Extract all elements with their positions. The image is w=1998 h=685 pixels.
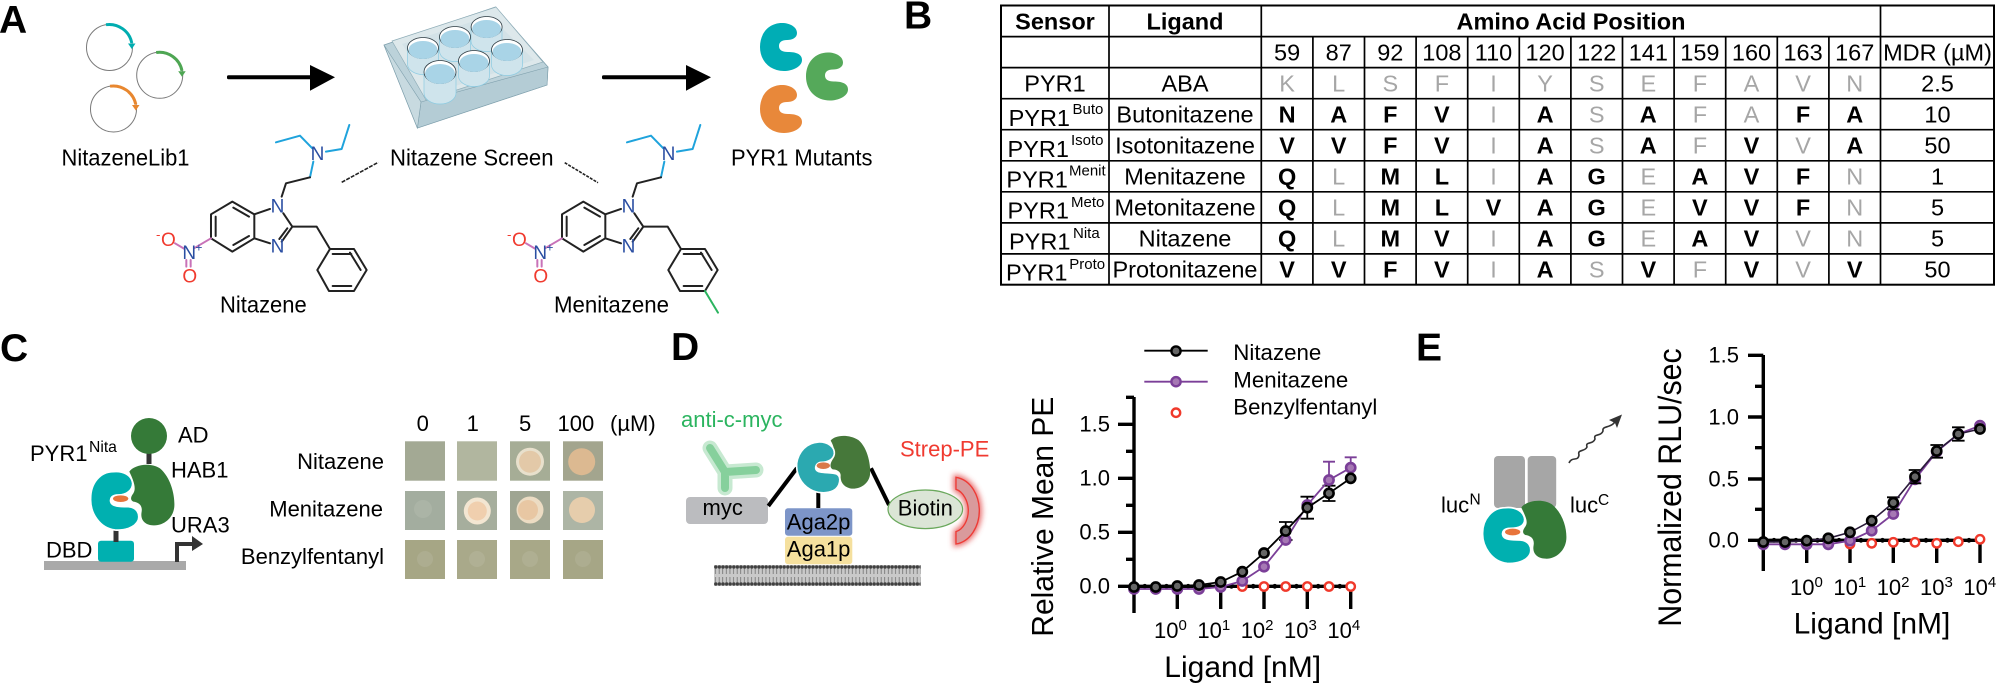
table: sensors and amino acid positions: G bbox=[1588, 226, 1606, 252]
chart: relative mean PE dose response: 3 bbox=[1308, 617, 1317, 634]
chart: normalized RLU dose response: 10 bbox=[1920, 575, 1944, 600]
chart: normalized RLU dose response: Ligand [nM] bbox=[1794, 607, 1950, 640]
table: sensors and amino acid positions: V bbox=[1795, 70, 1811, 96]
table: sensors and amino acid positions: Buto bbox=[1072, 101, 1103, 118]
table: sensors and amino acid positions: Amino Acid Position bbox=[1457, 8, 1685, 34]
icon: plasmid library bbox=[86, 24, 186, 132]
table: sensors and amino acid positions: 167 bbox=[1835, 39, 1874, 65]
table: sensors and amino acid positions: E bbox=[1640, 226, 1656, 252]
table: sensors and amino acid positions: V bbox=[1434, 132, 1450, 158]
table: sensors and amino acid positions: E bbox=[1640, 70, 1656, 96]
legend: Benzylfentanyl bbox=[1233, 394, 1377, 419]
table: sensors and amino acid positions: V bbox=[1744, 164, 1760, 190]
chart: normalized RLU dose response: 2 bbox=[1901, 574, 1910, 591]
table: sensors and amino acid positions: V bbox=[1434, 101, 1450, 127]
table: sensors and amino acid positions: A bbox=[1744, 101, 1760, 127]
table: sensors and amino acid positions: MDR (µM) bbox=[1883, 39, 1992, 65]
chart: relative mean PE dose response: 10 bbox=[1197, 618, 1222, 643]
chemical structure: menitazene: O bbox=[533, 267, 548, 288]
table: sensors and amino acid positions: 87 bbox=[1326, 39, 1352, 65]
table: sensors and amino acid positions: V bbox=[1640, 257, 1656, 283]
table: sensors and amino acid positions: 160 bbox=[1732, 39, 1771, 65]
table: sensors and amino acid positions: G bbox=[1588, 195, 1606, 221]
table: sensors and amino acid positions: 1 bbox=[1931, 164, 1944, 190]
arrow: library to screen bbox=[227, 65, 335, 91]
table: sensors and amino acid positions: V bbox=[1847, 257, 1863, 283]
yeast concentration headers: 5 bbox=[519, 411, 531, 436]
icon: streptavidin-PE crescent bbox=[956, 477, 979, 544]
membrane bbox=[714, 565, 921, 586]
table: sensors and amino acid positions: M bbox=[1381, 195, 1400, 221]
chart: normalized RLU dose response: 0.0 bbox=[1708, 528, 1739, 553]
table: sensors and amino acid positions: A bbox=[1846, 132, 1863, 158]
chart: normalized RLU dose response: 0 bbox=[1814, 574, 1823, 591]
table: sensors and amino acid positions: A bbox=[1691, 226, 1708, 252]
table: sensors and amino acid positions: I bbox=[1490, 164, 1497, 190]
icon: luminescence squiggle arrow bbox=[1569, 414, 1622, 463]
label: Strep-PE: Strep-PE bbox=[900, 437, 989, 462]
chemical structure: menitazene: N bbox=[662, 144, 675, 165]
table: sensors and amino acid positions: Ligand bbox=[1146, 8, 1224, 34]
y axis title: Relative Mean PE: Relative Mean PE bbox=[1025, 397, 1060, 637]
label: luc C: luc bbox=[1570, 492, 1598, 518]
table: sensors and amino acid positions: A bbox=[1640, 101, 1657, 127]
table: sensors and amino acid positions: PYR1 bbox=[1008, 136, 1069, 162]
yeast row labels: Nitazene bbox=[297, 449, 384, 474]
table: sensors and amino acid positions: V bbox=[1434, 226, 1450, 252]
table: sensors and amino acid positions: F bbox=[1796, 164, 1810, 190]
table: sensors and amino acid positions: 50 bbox=[1924, 257, 1951, 283]
table: sensors and amino acid positions: M bbox=[1381, 226, 1400, 252]
chemical structure: nitazene bbox=[156, 125, 367, 291]
table: sensors and amino acid positions: V bbox=[1795, 257, 1811, 283]
table: sensors and amino acid positions: Q bbox=[1278, 164, 1296, 190]
panel: C yeast two-hybrid bbox=[0, 327, 656, 579]
chemical structure: nitazene: O bbox=[182, 267, 197, 288]
label: anti-c-myc: anti-c-myc bbox=[681, 407, 782, 432]
yeast concentration headers: 100 bbox=[558, 411, 594, 436]
table: sensors and amino acid positions: 92 bbox=[1377, 39, 1403, 65]
table: sensors and amino acid positions: V bbox=[1795, 132, 1811, 158]
linkers bbox=[768, 468, 889, 508]
chemical structure: nitazene: N bbox=[271, 236, 284, 257]
chemical structure: menitazene: N bbox=[622, 196, 635, 217]
chart: normalized RLU dose response: 1 bbox=[1858, 574, 1866, 591]
chart: relative mean PE dose response: 10 bbox=[1241, 618, 1265, 643]
chemical structure: menitazene: N bbox=[533, 243, 547, 264]
table: sensors and amino acid positions: N bbox=[1846, 164, 1863, 190]
dashed connector: screen to menitazene bbox=[565, 163, 598, 183]
table: sensors and amino acid positions: G bbox=[1588, 164, 1606, 190]
box: myc: myc bbox=[703, 495, 743, 520]
table: sensors and amino acid positions: A bbox=[1330, 101, 1347, 127]
table: sensors and amino acid positions: L bbox=[1332, 195, 1345, 221]
table: sensors and amino acid positions bbox=[1001, 6, 1994, 286]
table: sensors and amino acid positions: V bbox=[1434, 257, 1450, 283]
table: sensors and amino acid positions: Y bbox=[1537, 70, 1553, 96]
table: sensors and amino acid positions: L bbox=[1435, 195, 1449, 221]
table: sensors and amino acid positions: K bbox=[1279, 70, 1295, 96]
table: sensors and amino acid positions: V bbox=[1744, 257, 1760, 283]
table: sensors and amino acid positions: A bbox=[1691, 164, 1708, 190]
chart: normalized RLU dose response: 10 bbox=[1833, 575, 1858, 600]
chemical structure: menitazene: + bbox=[546, 241, 553, 255]
table: sensors and amino acid positions: PYR1 bbox=[1008, 197, 1069, 223]
label: PYR1 Mutants: PYR1 Mutants bbox=[731, 144, 872, 170]
table: sensors and amino acid positions: 159 bbox=[1680, 39, 1720, 65]
chart: relative mean PE dose response: 1.5 bbox=[1079, 412, 1110, 437]
table: sensors and amino acid positions: Proto bbox=[1069, 256, 1105, 273]
panel: D yeast surface display bbox=[671, 326, 1377, 684]
table: sensors and amino acid positions: I bbox=[1490, 132, 1497, 158]
table: sensors and amino acid positions: S bbox=[1589, 70, 1605, 96]
table: sensors and amino acid positions: V bbox=[1744, 226, 1760, 252]
table: sensors and amino acid positions: V bbox=[1331, 257, 1347, 283]
table: sensors and amino acid positions: I bbox=[1490, 70, 1497, 96]
yeast concentration headers: 0 bbox=[417, 411, 429, 436]
label: URA3: URA3 bbox=[171, 513, 230, 538]
table: sensors and amino acid positions: 110 bbox=[1475, 39, 1512, 65]
icon: antibody bbox=[710, 448, 756, 488]
box: Aga2p: Aga2p bbox=[787, 509, 850, 534]
table: sensors and amino acid positions: PYR1 bbox=[1024, 70, 1086, 96]
table: sensors and amino acid positions: I bbox=[1490, 257, 1497, 283]
table: sensors and amino acid positions: F bbox=[1693, 257, 1707, 283]
label: Nitazene: Nitazene bbox=[220, 291, 307, 317]
chemical structure: menitazene: O bbox=[512, 230, 527, 251]
table: sensors and amino acid positions: Menit bbox=[1069, 163, 1107, 180]
chart: normalized RLU dose response: 0.5 bbox=[1708, 466, 1739, 491]
panel: E luciferase assay bbox=[1416, 327, 1996, 640]
table: sensors and amino acid positions: A bbox=[1640, 132, 1657, 158]
table: sensors and amino acid positions: A bbox=[1537, 226, 1554, 252]
legend: Nitazene bbox=[1233, 340, 1321, 365]
panel: A library to mutants workflow bbox=[0, 0, 872, 317]
chart: relative mean PE dose response: 2 bbox=[1265, 617, 1274, 634]
table: sensors and amino acid positions: Q bbox=[1278, 226, 1296, 252]
table: sensors and amino acid positions: F bbox=[1693, 70, 1707, 96]
chemical structure: nitazene: + bbox=[195, 241, 202, 255]
table: sensors and amino acid positions: A bbox=[1537, 257, 1554, 283]
chart: normalized RLU dose response: 3 bbox=[1944, 574, 1953, 591]
table: sensors and amino acid positions: N bbox=[1846, 70, 1863, 96]
chart: normalized RLU dose response: 1.0 bbox=[1708, 404, 1739, 429]
table: sensors and amino acid positions: S bbox=[1382, 70, 1398, 96]
yeast row labels: Menitazene bbox=[269, 497, 383, 522]
table: sensors and amino acid positions: Protonitazene bbox=[1112, 257, 1258, 283]
table: sensors and amino acid positions: E bbox=[1640, 195, 1656, 221]
y axis title: Normalized RLU/sec: Normalized RLU/sec bbox=[1652, 348, 1688, 627]
table: sensors and amino acid positions: F bbox=[1796, 101, 1810, 127]
chart: normalized RLU dose response: 4 bbox=[1988, 574, 1996, 591]
table: sensors and amino acid positions: 108 bbox=[1422, 39, 1462, 65]
chart: relative mean PE dose response: 1.0 bbox=[1079, 466, 1110, 491]
table: sensors and amino acid positions: A bbox=[1537, 101, 1554, 127]
table: sensors and amino acid positions: 122 bbox=[1577, 39, 1616, 65]
table: sensors and amino acid positions: V bbox=[1331, 132, 1347, 158]
label: Nitazene Screen: Nitazene Screen bbox=[390, 145, 554, 171]
table: sensors and amino acid positions: Butonitazene bbox=[1116, 101, 1254, 127]
box: myc bbox=[686, 495, 768, 524]
table: sensors and amino acid positions: PYR1 bbox=[1006, 260, 1067, 286]
chart: relative mean PE dose response: 0.5 bbox=[1079, 520, 1110, 545]
table: sensors and amino acid positions: 10 bbox=[1924, 101, 1951, 127]
icon: PYR1 HAB1 complex bbox=[797, 436, 870, 493]
panel letter C: C bbox=[0, 327, 28, 370]
table: sensors and amino acid positions: S bbox=[1589, 257, 1605, 283]
table: sensors and amino acid positions: PYR1 bbox=[1006, 167, 1068, 193]
panel letter E: E bbox=[1416, 327, 1442, 370]
box: Aga1p: Aga1p bbox=[787, 537, 850, 562]
chart: relative mean PE dose response: 0.0 bbox=[1079, 574, 1110, 599]
label: PYR1 Nita: Nita bbox=[89, 439, 117, 456]
chart: relative mean PE dose response: 10 bbox=[1327, 618, 1352, 643]
chart: relative mean PE dose response: Ligand [nM] bbox=[1164, 651, 1321, 684]
chart: relative mean PE dose response: 0 bbox=[1178, 617, 1187, 634]
table: sensors and amino acid positions: F bbox=[1383, 101, 1397, 127]
chart: normalized RLU dose response: 10 bbox=[1877, 575, 1901, 600]
table: sensors and amino acid positions: A bbox=[1846, 101, 1863, 127]
table: sensors and amino acid positions: 2.5 bbox=[1921, 70, 1954, 96]
table: sensors and amino acid positions: 5 bbox=[1931, 226, 1944, 252]
table: sensors and amino acid positions: N bbox=[1846, 195, 1863, 221]
table: sensors and amino acid positions: V bbox=[1692, 195, 1708, 221]
panel letter D: D bbox=[671, 326, 699, 369]
label: luc N: N bbox=[1470, 492, 1481, 508]
arrow: screen to mutants bbox=[602, 65, 711, 91]
dashed connector: screen to nitazene bbox=[342, 162, 378, 182]
table: sensors and amino acid positions: Isotonitazene bbox=[1115, 132, 1255, 158]
yeast row labels: Benzylfentanyl bbox=[241, 544, 384, 569]
yeast concentration headers: 1 bbox=[467, 411, 479, 436]
chart: relative mean PE dose response: 4 bbox=[1352, 617, 1360, 634]
table: sensors and amino acid positions: E bbox=[1640, 164, 1656, 190]
table: sensors and amino acid positions: Q bbox=[1278, 195, 1296, 221]
yeast concentration headers: (µM) bbox=[610, 411, 656, 436]
legend bbox=[1144, 340, 1377, 419]
yeast concentration headers bbox=[417, 411, 656, 436]
label: PYR1 Nita: PYR1 bbox=[30, 441, 87, 466]
ellipse: Biotin: Biotin bbox=[898, 496, 953, 521]
table: sensors and amino acid positions: 59 bbox=[1274, 39, 1300, 65]
table: sensors and amino acid positions: ABA bbox=[1161, 70, 1209, 96]
table: sensors and amino acid positions: L bbox=[1332, 164, 1345, 190]
table: sensors and amino acid positions: Isoto bbox=[1071, 132, 1104, 149]
table: sensors and amino acid positions: F bbox=[1796, 195, 1810, 221]
table: sensors and amino acid positions: N bbox=[1279, 101, 1296, 127]
table: sensors and amino acid positions: I bbox=[1490, 226, 1497, 252]
table: sensors and amino acid positions: I bbox=[1490, 101, 1497, 127]
table: sensors and amino acid positions: Menitazene bbox=[1124, 164, 1246, 190]
table: sensors and amino acid positions: V bbox=[1486, 195, 1502, 221]
table: sensors and amino acid positions: L bbox=[1332, 70, 1345, 96]
table: sensors and amino acid positions: A bbox=[1744, 70, 1760, 96]
table: sensors and amino acid positions: F bbox=[1693, 101, 1707, 127]
table: sensors and amino acid positions: 50 bbox=[1924, 132, 1951, 158]
yeast row labels bbox=[241, 449, 384, 569]
table: sensors and amino acid positions: Meto bbox=[1071, 194, 1104, 211]
chart: relative mean PE dose response: 10 bbox=[1154, 618, 1178, 643]
table: sensors and amino acid positions: S bbox=[1589, 101, 1605, 127]
yeast growth spot grid bbox=[405, 441, 603, 579]
diagram: two-hybrid schematic bbox=[44, 418, 203, 570]
chart: normalized RLU dose response: 10 bbox=[1963, 575, 1988, 600]
table: sensors and amino acid positions: 163 bbox=[1783, 39, 1823, 65]
table: sensors and amino acid positions: S bbox=[1589, 132, 1605, 158]
chemical structure: nitazene: N bbox=[182, 243, 196, 264]
table: sensors and amino acid positions: A bbox=[1537, 195, 1554, 221]
table: sensors and amino acid positions: 141 bbox=[1629, 39, 1668, 65]
table: sensors and amino acid positions: F bbox=[1383, 132, 1397, 158]
table: sensors and amino acid positions: L bbox=[1435, 164, 1449, 190]
table: sensors and amino acid positions: A bbox=[1537, 164, 1554, 190]
label: luc C: C bbox=[1598, 492, 1609, 509]
chemical structure: nitazene: N bbox=[311, 144, 324, 165]
table: sensors and amino acid positions: Nita bbox=[1073, 225, 1100, 242]
table: sensors and amino acid positions: V bbox=[1795, 226, 1811, 252]
table: sensors and amino acid positions: Metonitazene bbox=[1114, 195, 1256, 221]
table: sensors and amino acid positions: V bbox=[1744, 195, 1760, 221]
chemical structure: menitazene bbox=[507, 125, 718, 313]
table: sensors and amino acid positions: F bbox=[1693, 132, 1707, 158]
table: sensors and amino acid positions: N bbox=[1846, 226, 1863, 252]
label: HAB1: HAB1 bbox=[171, 457, 228, 482]
table: sensors and amino acid positions: Nitazene bbox=[1139, 226, 1231, 252]
table: sensors and amino acid positions: V bbox=[1744, 132, 1760, 158]
chemical structure: nitazene: - bbox=[156, 227, 160, 242]
table: sensors and amino acid positions: V bbox=[1279, 132, 1295, 158]
chemical structure: menitazene: - bbox=[507, 227, 511, 242]
table: sensors and amino acid positions: PYR1 bbox=[1009, 105, 1070, 131]
icon: PYR1 mutant proteins bbox=[760, 23, 848, 133]
table: sensors and amino acid positions: A bbox=[1537, 132, 1554, 158]
chemical structure: menitazene: N bbox=[622, 236, 635, 257]
table: sensors and amino acid positions: Sensor bbox=[1015, 8, 1095, 34]
table: sensors and amino acid positions: L bbox=[1332, 226, 1345, 252]
legend: Menitazene bbox=[1233, 367, 1348, 392]
table: sensors and amino acid positions: M bbox=[1381, 164, 1400, 190]
chemical structure: nitazene: O bbox=[161, 230, 176, 251]
icon: luciferase fragments bbox=[1494, 456, 1556, 508]
table: sensors and amino acid positions: F bbox=[1383, 257, 1397, 283]
table: sensors and amino acid positions: 120 bbox=[1525, 39, 1565, 65]
table: sensors and amino acid positions: V bbox=[1279, 257, 1295, 283]
chemical structure: nitazene: N bbox=[271, 196, 284, 217]
chart: normalized RLU dose response bbox=[1708, 343, 1996, 640]
table: sensors and amino acid positions: 5 bbox=[1931, 195, 1944, 221]
chart: normalized RLU dose response: 10 bbox=[1790, 575, 1814, 600]
label: DBD: DBD bbox=[46, 538, 92, 562]
table: sensors and amino acid positions: F bbox=[1435, 70, 1449, 96]
ellipse: Biotin bbox=[888, 490, 963, 529]
icon: six-well plate bbox=[384, 7, 548, 128]
label: Menitazene: Menitazene bbox=[554, 291, 669, 317]
label: luc N: luc bbox=[1441, 492, 1469, 518]
chart: relative mean PE dose response: 10 bbox=[1284, 618, 1308, 643]
label: AD: AD bbox=[178, 423, 209, 448]
chart: relative mean PE dose response: 1 bbox=[1222, 617, 1230, 634]
chart: relative mean PE dose response bbox=[1079, 397, 1360, 684]
chart: normalized RLU dose response: 1.5 bbox=[1708, 343, 1739, 368]
label: NitazeneLib1: NitazeneLib1 bbox=[62, 145, 190, 171]
icon: PYR1 HAB1 complex bbox=[1483, 501, 1566, 563]
table: sensors and amino acid positions: PYR1 bbox=[1009, 229, 1070, 255]
